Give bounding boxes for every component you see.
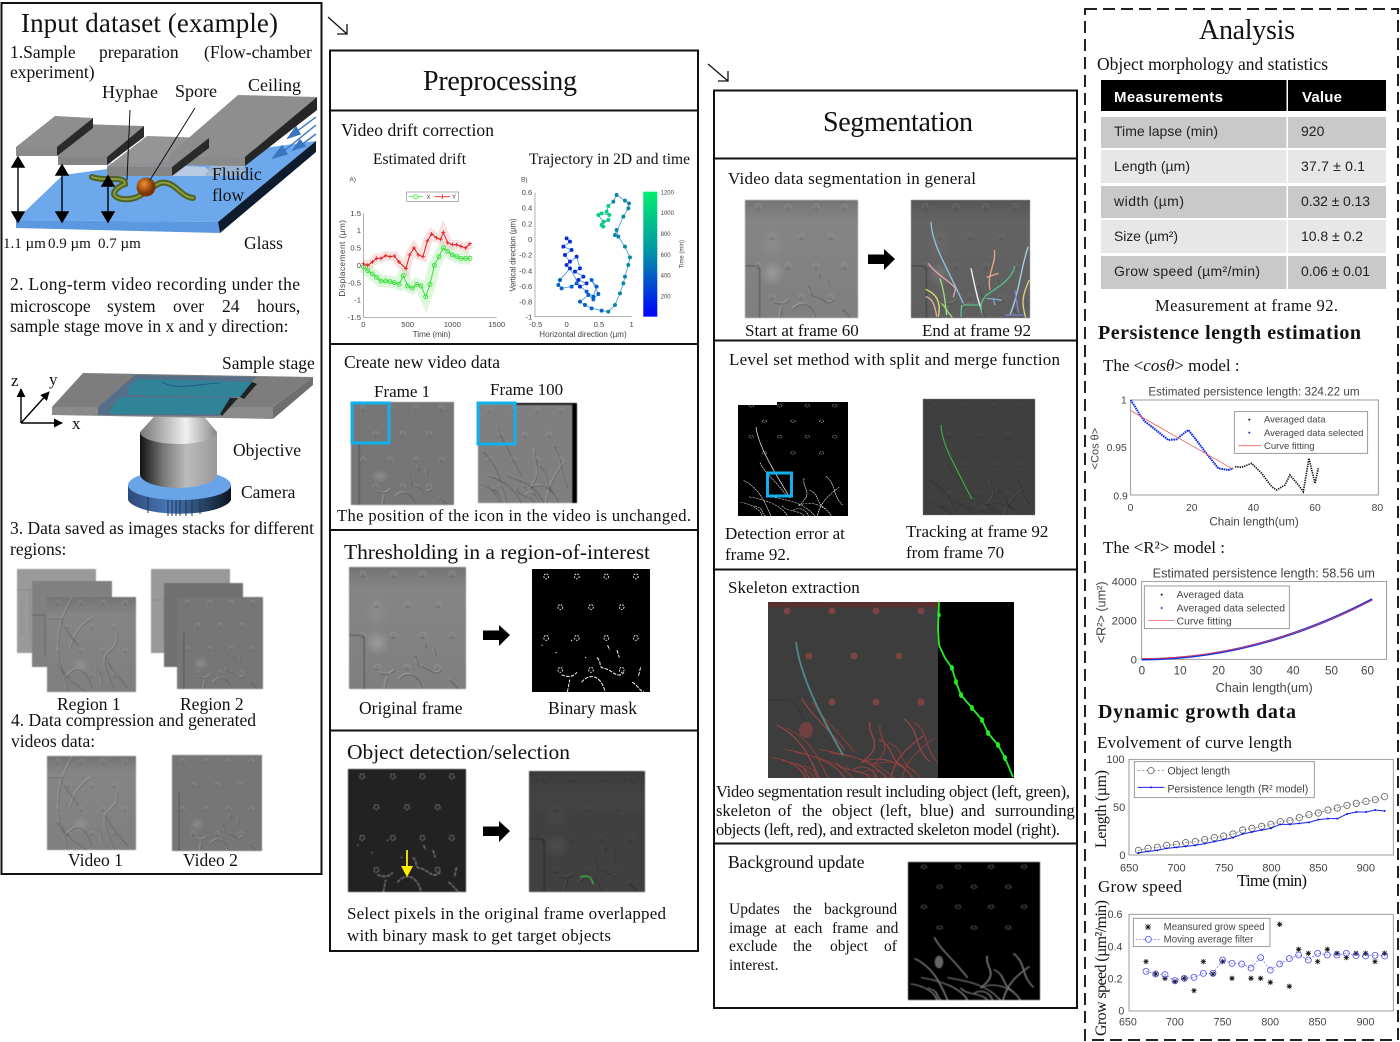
icon: yellow arrow <box>401 850 413 877</box>
table: measurements <box>1101 80 1386 289</box>
label: time axis: Time (min) <box>1237 871 1307 890</box>
label: region 1: Region 1 <box>57 694 121 714</box>
section: level set method <box>725 350 1060 564</box>
chart: grow speed: 0.2 <box>1108 973 1123 985</box>
chart: grow speed: 0.6 <box>1108 909 1123 921</box>
text: background description: and <box>876 920 899 937</box>
arrow: general <box>868 249 895 270</box>
chart: cos model: <Cos θ> <box>1089 428 1101 469</box>
step 1 text: (Flow-chamber <box>204 42 312 62</box>
chart: curve length: 900 <box>1357 863 1375 875</box>
caption: tracking: Tracking at frame 92 <box>906 522 1048 541</box>
image: video 1 <box>47 756 136 851</box>
section: object detection <box>347 740 666 945</box>
subheading: create new video data: Create new video data <box>344 352 500 372</box>
table: measurements: Length (µm) <box>1114 158 1190 174</box>
step 2 text: system <box>107 296 156 316</box>
line chart: estimated drift: 1.5 <box>350 209 361 218</box>
step 4 text: 4. Data compression and generated <box>11 710 256 730</box>
chart: R2 model: Averaged data <box>1177 590 1244 601</box>
chart title: trajectory: Trajectory in 2D and time <box>529 151 690 168</box>
panel: segmentation <box>714 90 1077 1008</box>
text: background description: image <box>729 920 767 937</box>
icon: hyphae <box>92 177 193 199</box>
caption: measurement frame: Measurement at frame 92. <box>1155 296 1338 315</box>
caption: segmentation result: Video segmentation result including object (left, green), <box>716 782 1070 801</box>
step 1 text: preparation <box>99 42 179 62</box>
section: skeleton extraction <box>716 578 1075 839</box>
chart: curve length: 100 <box>1106 754 1125 766</box>
image: tracking result <box>923 399 1035 515</box>
image: original frame <box>349 567 466 690</box>
chart: curve length <box>1106 754 1393 875</box>
chart: R2 model: <R²> (um²) <box>1095 581 1109 643</box>
label: start frame: Start at frame 60 <box>745 321 859 340</box>
scatter chart: trajectory: 0 <box>528 235 532 244</box>
icon: sample stage <box>52 373 313 419</box>
arrow: input to preprocessing <box>328 17 347 34</box>
image: skeleton model <box>937 602 1014 778</box>
scatter chart: trajectory: -1 <box>526 312 532 321</box>
table: measurements: Time lapse (min) <box>1114 123 1218 139</box>
step 2 text: 2. Long-term video recording under the <box>10 274 300 294</box>
chart: grow speed: Meansured grow speed <box>1164 922 1265 933</box>
caption: select pixels: Select pixels in the original frame overlapped <box>347 904 666 923</box>
chart: cos model: 80 <box>1372 503 1383 514</box>
text: background description: interest. <box>729 957 778 974</box>
step 2 text: hours, <box>257 296 300 316</box>
marker: frame 100 region box <box>478 403 515 444</box>
label: spore: Spore <box>175 81 217 101</box>
section: create new video data <box>337 352 691 525</box>
chart: grow speed: 700 <box>1166 1017 1184 1029</box>
line chart: estimated drift: X <box>426 194 431 201</box>
chart: cos model: Estimated persistence length: 324.22 um <box>1148 386 1360 399</box>
heading: preprocessing: Preprocessing <box>423 66 577 97</box>
label: camera: Camera <box>241 482 296 502</box>
label: frame 1: Frame 1 <box>374 382 430 401</box>
scatter chart: trajectory: -0.6 <box>519 282 532 291</box>
chart: curve length: 850 <box>1309 863 1328 875</box>
scatter chart: trajectory: 200 <box>661 295 671 301</box>
label: glass: Glass <box>244 233 283 253</box>
chart: R2 model: 40 <box>1287 665 1300 678</box>
scatter chart: trajectory: Time (min) <box>679 240 685 268</box>
scatter chart: trajectory: -0.5 <box>529 320 542 329</box>
chart: R2 model: 60 <box>1361 665 1374 678</box>
section: video drift correction <box>337 120 690 339</box>
image: frame 100 <box>478 403 577 504</box>
chart: cos model: 0.9 <box>1113 491 1128 502</box>
chart: R2 model: 10 <box>1174 665 1187 678</box>
label: ceiling: Ceiling <box>248 75 301 95</box>
chart: grow speed: 850 <box>1309 1017 1326 1029</box>
subheading: grow speed: Grow speed <box>1098 877 1182 896</box>
marker: frame 1 region box <box>352 403 389 443</box>
subheading: thresholding: Thresholding in a region-of-interest <box>344 540 650 564</box>
chart: cos model: Curve fitting <box>1264 441 1315 452</box>
caption: detection error: Detection error at <box>725 524 845 543</box>
subheading: evolvement: Evolvement of curve length <box>1097 733 1292 752</box>
chart: curve length: 700 <box>1167 863 1186 875</box>
caption: segmentation result: surrounding <box>995 801 1075 820</box>
scatter chart: trajectory: 0.4 <box>522 204 533 213</box>
image: frame 1 <box>351 402 454 513</box>
chart: cos model: 0 <box>1128 503 1134 514</box>
step 3 text: regions: <box>10 539 66 559</box>
caption: segmentation result: blue) <box>920 801 954 820</box>
caption: segmentation result: of <box>778 801 792 820</box>
chart: grow speed: 650 <box>1119 1017 1137 1029</box>
chart: cos model <box>1089 386 1383 528</box>
subheading: general: Video data segmentation in general <box>728 169 976 188</box>
image: binary mask <box>532 569 650 692</box>
label: cos model: The <cosθ> model : <box>1103 356 1240 375</box>
icon: camera <box>128 470 231 516</box>
chart: grow speed: 0.4 <box>1108 941 1123 953</box>
caption: segmentation result: and <box>961 801 986 820</box>
leader lines <box>127 108 195 180</box>
scatter chart: trajectory <box>509 176 685 339</box>
panel: input dataset <box>2 3 322 874</box>
icon: xyz axes <box>21 389 62 423</box>
image: selected object <box>529 771 645 893</box>
line chart: estimated drift: 0 <box>357 261 361 270</box>
icon: spore <box>136 178 156 196</box>
table: measurements: Value <box>1302 89 1342 106</box>
label: fluidic flow: Fluidic <box>212 164 262 184</box>
table: measurements: 920 <box>1301 123 1325 139</box>
scatter chart: trajectory: 0.5 <box>594 320 604 329</box>
chart: grow speed: 750 <box>1214 1017 1232 1029</box>
heading: analysis: Analysis <box>1199 15 1295 46</box>
text: background description: frame <box>832 920 868 937</box>
image: background <box>908 862 1040 1000</box>
caption: detection error: frame 92. <box>725 545 790 564</box>
scatter chart: trajectory: Vertical direction (µm) <box>509 218 518 292</box>
chart: R2 model <box>1095 566 1387 695</box>
scatter chart: trajectory: -0.2 <box>519 251 532 260</box>
chart: cos model: 0.95 <box>1107 443 1127 454</box>
chart: R2 model: Chain length(um) <box>1216 681 1313 695</box>
image: start frame <box>745 200 858 319</box>
chart: R2 model: 2000 <box>1112 616 1137 628</box>
line chart: estimated drift: 1 <box>357 226 361 235</box>
line chart: estimated drift: A) <box>349 176 356 183</box>
caption: segmentation result: the <box>802 801 822 820</box>
text: background description: of <box>884 938 898 955</box>
image: detection mask overlay <box>348 769 466 892</box>
chart: curve length: 750 <box>1215 863 1233 875</box>
text: background description: exclude <box>729 938 777 955</box>
chart: cos model: 60 <box>1309 503 1321 514</box>
heading: persistence length: Persistence length estimation <box>1098 322 1361 344</box>
panel: analysis <box>1085 9 1398 1040</box>
line chart: estimated drift: 0 <box>361 320 365 329</box>
caption: segmentation result: object <box>832 801 873 820</box>
chart: R2 model: 0 <box>1139 665 1146 678</box>
chart: R2 model: Estimated persistence length: 58.56 um <box>1153 566 1375 580</box>
chart: grow speed: 800 <box>1261 1017 1279 1029</box>
section: general segmentation <box>728 169 1031 340</box>
text: background description: the <box>793 938 812 955</box>
line chart: estimated drift: 1500 <box>488 320 505 329</box>
label: end frame: End at frame 92 <box>922 321 1031 340</box>
text: background description: object <box>830 938 869 955</box>
image: video 2 <box>172 755 262 859</box>
chart: R2 model: 0 <box>1131 655 1137 667</box>
chart: cos model: Averaged data <box>1264 415 1326 426</box>
label: grow speed axis: Grow speed (µm²/min) <box>1093 900 1110 1036</box>
label: fluidic flow: flow <box>212 185 244 205</box>
label: sample stage: Sample stage <box>222 353 315 373</box>
scatter chart: trajectory: 1200 <box>661 191 675 197</box>
heading: dynamic growth: Dynamic growth data <box>1098 701 1296 723</box>
chart: curve length: 650 <box>1120 863 1138 875</box>
chart: grow speed: 0 <box>1118 1006 1124 1018</box>
chart: cos model: 20 <box>1186 503 1198 514</box>
table: measurements: 10.8 ± 0.2 <box>1301 228 1363 244</box>
scatter chart: trajectory: 0.2 <box>522 219 532 228</box>
diagram: flow chamber <box>3 75 317 253</box>
chart: curve length: 800 <box>1262 863 1281 875</box>
label: binary mask: Binary mask <box>548 698 637 718</box>
chart title: estimated drift: Estimated drift <box>373 151 467 168</box>
image: detection error <box>738 402 848 516</box>
heading: input dataset: Input dataset (example) <box>21 8 278 38</box>
step 1 text: experiment) <box>10 62 95 82</box>
label: gap heights: 1.1 µm <box>3 236 46 252</box>
label: video 2: Video 2 <box>183 850 238 870</box>
label: frame 100: Frame 100 <box>490 380 563 399</box>
step 1 text: 1.Sample <box>10 42 76 62</box>
label: hyphae: Hyphae <box>102 82 158 102</box>
arrow: detection <box>483 821 510 842</box>
icon: flow arrows <box>273 117 316 158</box>
step 4 text: videos data: <box>11 731 95 751</box>
table: measurements: 37.7 ± 0.1 <box>1301 158 1365 174</box>
subheading: video drift correction: Video drift correction <box>341 120 494 140</box>
diagram: microscope <box>11 353 315 516</box>
step 2 text: 24 <box>222 296 240 316</box>
step 3 text: 3. Data saved as images stacks for different <box>10 518 314 538</box>
label: axes z y x: y <box>49 370 58 389</box>
table: measurements: Grow speed (µm²/min) <box>1114 263 1260 279</box>
table: measurements: 0.32 ± 0.13 <box>1301 193 1370 209</box>
label: original frame: Original frame <box>359 698 463 718</box>
chart: grow speed <box>1108 909 1393 1029</box>
scatter chart: trajectory: 800 <box>661 232 671 238</box>
caption: frame position: The position of the icon in the video is unchanged. <box>337 506 691 525</box>
table: measurements: 0.06 ± 0.01 <box>1301 263 1370 279</box>
scatter chart: trajectory: Horizontal direction (µm) <box>539 330 627 339</box>
caption: segmentation result: (left, <box>880 801 912 820</box>
label: R2 model: The <R²> model : <box>1103 538 1225 557</box>
table: measurements: width (µm) <box>1113 193 1184 209</box>
subheading: level set: Level set method with split and merge function <box>729 350 1060 369</box>
marker: error region box <box>768 473 792 496</box>
scatter chart: trajectory: 0.6 <box>522 188 532 197</box>
chart: R2 model: 20 <box>1212 665 1225 678</box>
chart: R2 model: 50 <box>1325 665 1338 678</box>
image: segmentation overlay <box>768 602 940 781</box>
chart: curve length: Persistence length (R² model) <box>1167 783 1308 795</box>
icon: objective <box>140 408 217 488</box>
scatter chart: trajectory: 600 <box>661 253 671 259</box>
arrow: threshold <box>483 625 510 646</box>
step 2 text: microscope <box>10 296 91 316</box>
chart: cos model: 40 <box>1248 503 1259 514</box>
scatter chart: trajectory: 1000 <box>661 211 675 217</box>
label: gap heights: 0.7 µm <box>98 236 141 252</box>
section: thresholding <box>344 540 650 718</box>
image stack: region 1 <box>17 569 136 693</box>
label: region 2: Region 2 <box>180 694 244 714</box>
line chart: estimated drift: -0.5 <box>348 279 361 288</box>
subheading: skeleton: Skeleton extraction <box>728 578 860 597</box>
image: end frame with coloured hyphae <box>911 200 1030 319</box>
chart: cos model: 1 <box>1121 396 1127 407</box>
line chart: estimated drift: 500 <box>401 320 414 329</box>
text: background description: Updates <box>729 901 780 918</box>
text: background description: background <box>824 901 897 918</box>
chart: grow speed: Moving average filter <box>1164 935 1254 946</box>
text: background description: each <box>794 920 823 937</box>
label: length axis: Length (µm) <box>1093 770 1110 848</box>
heading: segmentation: Segmentation <box>823 107 973 138</box>
subheading: object detection: Object detection/selection <box>347 740 570 764</box>
scatter chart: trajectory: 0 <box>565 320 569 329</box>
subheading: background update: Background update <box>728 852 865 872</box>
chart: cos model: Averaged data selected <box>1264 428 1363 439</box>
label: axes z y x: x <box>72 414 81 433</box>
chart: curve length: Object length <box>1167 765 1230 777</box>
caption: select pixels: with binary mask to get target objects <box>347 926 611 945</box>
caption: segmentation result: objects (left, red), and extracted skeleton model (right). <box>716 820 1060 839</box>
scatter chart: trajectory: -0.8 <box>519 298 532 307</box>
chart: curve length: 50 <box>1113 802 1125 814</box>
text: background description: the <box>793 901 812 918</box>
chart: R2 model: Averaged data selected <box>1177 603 1285 614</box>
line chart: estimated drift: 0.5 <box>350 244 361 253</box>
subheading: morphology: Object morphology and statistics <box>1097 54 1328 74</box>
label: objective: Objective <box>233 440 301 460</box>
chart: grow speed: 900 <box>1357 1017 1374 1029</box>
line chart: estimated drift: -1.5 <box>348 313 361 322</box>
label: video 1: Video 1 <box>68 850 123 870</box>
chart: cos model: Chain length(um) <box>1209 515 1299 528</box>
step 2 text: over <box>173 296 204 316</box>
scatter chart: trajectory: 1 <box>630 320 634 329</box>
scatter chart: trajectory: B) <box>521 176 528 183</box>
height arrows <box>12 157 114 222</box>
line chart: estimated drift: -1 <box>354 296 361 305</box>
table: measurements: Size (µm²) <box>1114 228 1178 244</box>
scatter chart: trajectory: -0.4 <box>519 266 533 275</box>
image stack: region 2 <box>151 569 263 696</box>
caption: tracking: from frame 70 <box>906 543 1004 562</box>
step 2 text: sample stage move in x and y direction: <box>10 316 288 336</box>
caption: segmentation result: skeleton <box>716 801 771 820</box>
chart: R2 model: 30 <box>1249 665 1263 678</box>
line chart: estimated drift: 1000 <box>444 320 461 329</box>
line chart: estimated drift <box>337 176 505 339</box>
chart: curve length: 0 <box>1119 850 1125 862</box>
chart: R2 model: 4000 <box>1112 577 1137 589</box>
line chart: estimated drift: Time (min) <box>413 329 451 339</box>
section: background update <box>728 852 1040 1000</box>
chart: R2 model: Curve fitting <box>1177 616 1232 627</box>
table: measurements: Measurements <box>1114 89 1223 106</box>
line chart: estimated drift: Y <box>452 194 457 201</box>
line chart: estimated drift: Displacement (µm) <box>337 220 347 297</box>
scatter chart: trajectory: 400 <box>661 274 671 280</box>
panel: preprocessing <box>330 50 698 951</box>
label: axes z y x: z <box>11 371 19 390</box>
text: background description: at <box>775 920 787 937</box>
arrow: preprocessing to segmentation <box>708 64 728 81</box>
label: gap heights: 0.9 µm <box>48 236 91 252</box>
